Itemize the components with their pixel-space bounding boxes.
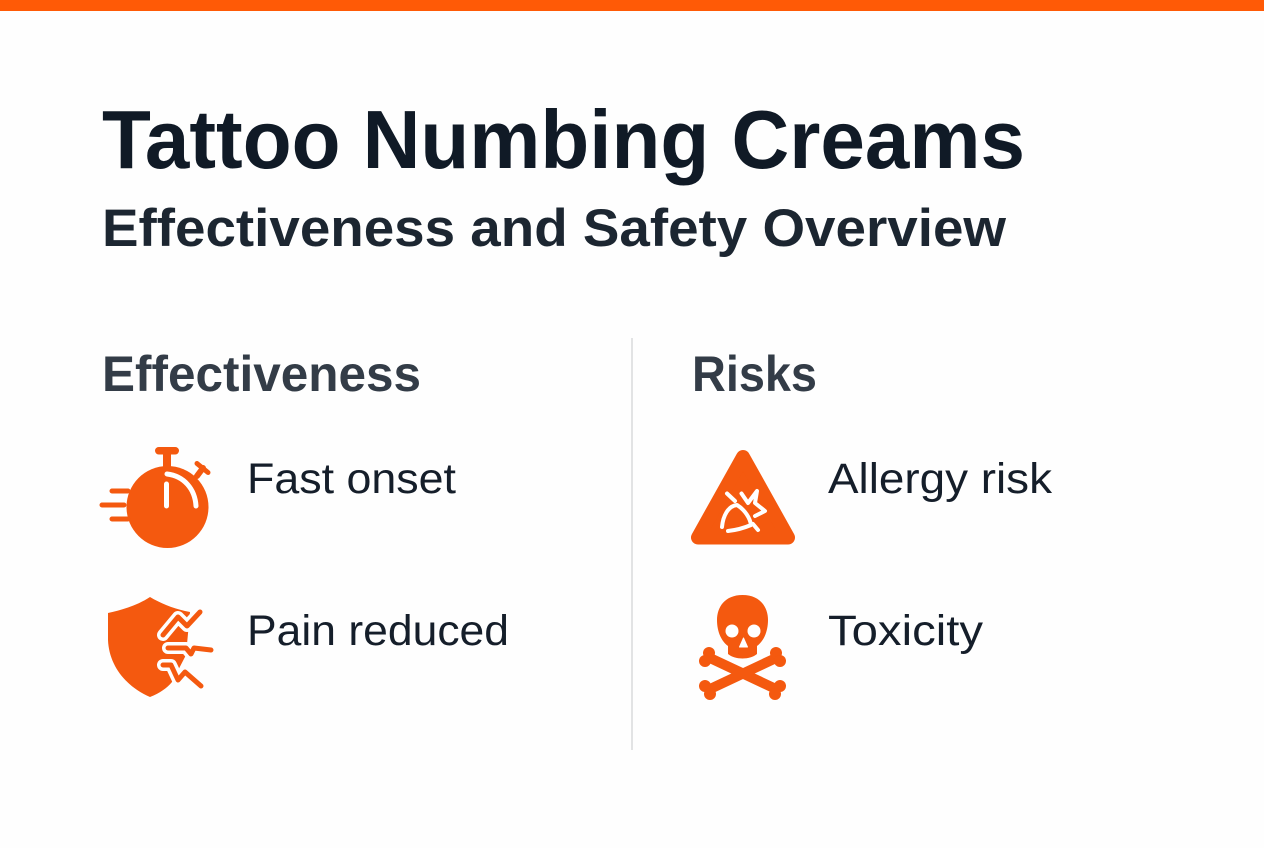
icon: shield with lightning — [108, 597, 211, 697]
icon: warning triangle — [698, 457, 788, 538]
title: Tattoo Numbing Creams — [102, 93, 1025, 186]
label: allergy risk: Allergy risk — [828, 455, 1053, 503]
icon: stopwatch — [102, 447, 208, 548]
heading: risks: Risks — [692, 346, 817, 402]
top accent bar — [0, 0, 1264, 11]
panel: effectiveness — [102, 346, 509, 697]
label: pain reduced: Pain reduced — [247, 607, 509, 655]
heading: effectiveness: Effectiveness — [102, 346, 421, 402]
panel: risks — [692, 346, 1053, 700]
divider — [631, 338, 633, 750]
label: fast onset: Fast onset — [247, 455, 456, 503]
subtitle: Effectiveness and Safety Overview — [102, 199, 1007, 258]
icon: skull and crossbones — [699, 595, 786, 700]
label: toxicity: Toxicity — [828, 607, 984, 655]
